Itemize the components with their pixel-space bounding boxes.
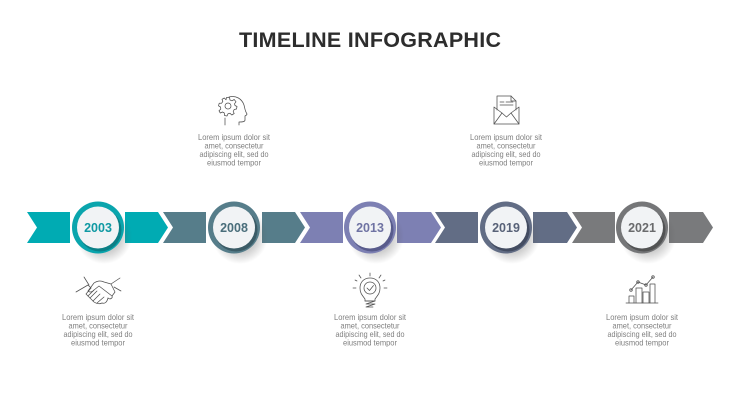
year badge 2003 xyxy=(72,202,124,254)
title: TIMELINE INFOGRAPHIC xyxy=(239,28,501,52)
year badge 2013 xyxy=(344,202,396,254)
icon: handshake xyxy=(76,277,121,304)
text block 2013: eiusmod tempor xyxy=(343,338,397,348)
timeline step 2008 xyxy=(163,202,305,264)
year badge 2021: 2021 xyxy=(628,221,656,235)
text block 2003: adipiscing elit, sed do xyxy=(64,330,133,339)
arrow segment 2008 xyxy=(163,212,305,243)
text block 2003 xyxy=(62,313,135,348)
text block 2013: adipiscing elit, sed do xyxy=(336,330,405,339)
text block 2013: Lorem ipsum dolor sit xyxy=(334,313,407,322)
year badge 2021 xyxy=(616,202,668,254)
timeline step 2013 xyxy=(300,202,441,264)
text block 2008: eiusmod tempor xyxy=(207,158,261,168)
timeline step 2003 xyxy=(27,202,168,264)
timeline step 2021 xyxy=(572,202,713,264)
text block 2008: adipiscing elit, sed do xyxy=(200,150,269,159)
year badge 2013: 2013 xyxy=(356,221,384,235)
icon: head with gear xyxy=(218,96,247,125)
text block 2019: Lorem ipsum dolor sit xyxy=(470,133,543,142)
text block 2021: Lorem ipsum dolor sit xyxy=(606,313,679,322)
text block 2019: adipiscing elit, sed do xyxy=(472,150,541,159)
year badge 2019 xyxy=(480,202,532,254)
text block 2019: eiusmod tempor xyxy=(479,158,533,168)
arrow segment 2013 xyxy=(300,212,441,243)
text block 2008: Lorem ipsum dolor sit xyxy=(198,133,271,142)
year badge 2008 xyxy=(208,202,260,254)
arrow segment 2021 xyxy=(572,212,713,243)
timeline step 2019 xyxy=(435,202,577,264)
text block 2021 xyxy=(606,313,679,348)
text block 2008 xyxy=(198,133,271,168)
text block 2013 xyxy=(334,313,407,348)
text block 2013: amet, consectetur xyxy=(340,322,400,330)
text block 2019 xyxy=(470,133,543,168)
year badge 2003: 2003 xyxy=(84,221,112,235)
text block 2019: amet, consectetur xyxy=(476,142,536,150)
icon: bar chart with trend line xyxy=(626,276,658,303)
icon: light bulb with check xyxy=(353,273,387,307)
text block 2021: adipiscing elit, sed do xyxy=(608,330,677,339)
text block 2003: Lorem ipsum dolor sit xyxy=(62,313,135,322)
text block 2021: eiusmod tempor xyxy=(615,338,669,348)
arrow segment 2019 xyxy=(435,212,577,243)
icon: envelope with letter xyxy=(494,96,519,124)
text block 2003: amet, consectetur xyxy=(68,322,128,330)
year badge 2019: 2019 xyxy=(492,221,520,235)
text block 2003: eiusmod tempor xyxy=(71,338,125,348)
arrow segment 2003 xyxy=(27,212,168,243)
year badge 2008: 2008 xyxy=(220,221,248,235)
text block 2008: amet, consectetur xyxy=(204,142,264,150)
text block 2021: amet, consectetur xyxy=(612,322,672,330)
